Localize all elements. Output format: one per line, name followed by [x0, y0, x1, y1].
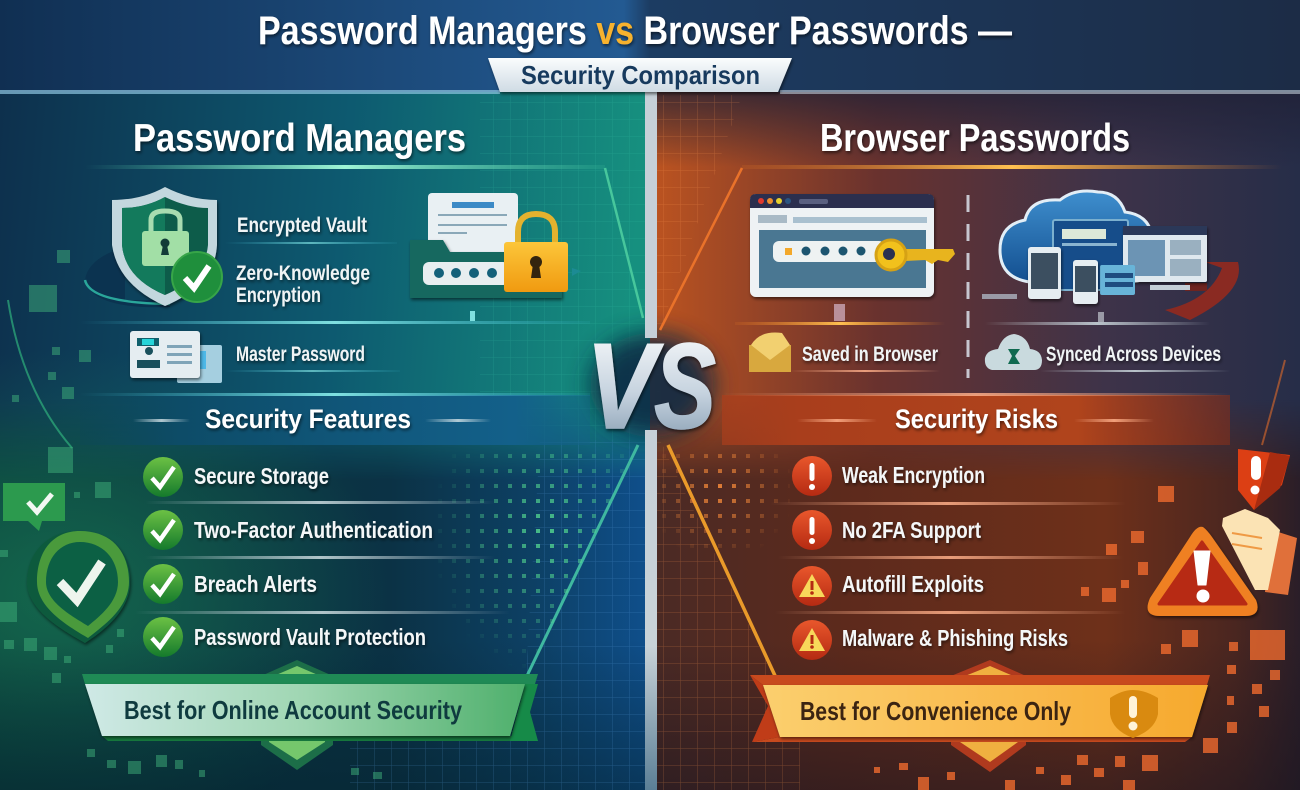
- label: saved in browser: Saved in Browser: [802, 343, 938, 366]
- background: right side: [650, 92, 1300, 790]
- security features band: [80, 393, 590, 445]
- badge: best for convenience only: Best for Convenience Only: [800, 696, 1071, 726]
- icon: folder with gold lock: [410, 193, 581, 298]
- vs emblem: [586, 318, 716, 454]
- item: malware and phishing risks: [792, 620, 1068, 660]
- panel: browser passwords: [660, 117, 1297, 790]
- item: weak encryption: [792, 456, 985, 496]
- icon: small cloud: [985, 334, 1042, 370]
- item: password vault protection: Password Vault Protection: [194, 624, 426, 650]
- background: left side: [0, 92, 650, 790]
- subtitle ribbon: Security Comparison: [521, 60, 760, 90]
- badge: best for online account security: [82, 660, 538, 770]
- icon: id card: [130, 331, 222, 383]
- label: synced across devices: Synced Across Devices: [1046, 343, 1221, 366]
- security features band: Security Features: [205, 404, 411, 434]
- item: breach alerts: [143, 564, 317, 604]
- item: two-factor authentication: [143, 510, 433, 550]
- dot matrix: [438, 454, 624, 653]
- item: two-factor authentication: Two-Factor Authentication: [194, 517, 433, 543]
- label: master password: Master Password: [236, 343, 365, 366]
- badge: best for convenience only: [750, 660, 1210, 772]
- item: no 2fa support: No 2FA Support: [842, 517, 981, 543]
- risk list: [770, 456, 1125, 660]
- red alert shield: [1238, 449, 1290, 510]
- item: password vault protection: [143, 617, 426, 657]
- icon: envelope: [749, 332, 791, 372]
- label: zero-knowledge encryption: Encryption: [236, 284, 321, 307]
- item: autofill exploits: [792, 566, 984, 606]
- vs emblem: S: [654, 318, 716, 454]
- feature list: [135, 457, 510, 657]
- header band: [0, 0, 1300, 92]
- item: secure storage: Secure Storage: [194, 463, 329, 489]
- vs backdrop: [590, 333, 714, 437]
- item: weak encryption: Weak Encryption: [842, 462, 985, 488]
- item: secure storage: [143, 457, 329, 497]
- speech bubble check: [3, 483, 65, 531]
- title: Password Managers vs Browser Passwords —: [258, 9, 1012, 53]
- label: zero-knowledge encryption: Zero-Knowledge: [236, 262, 370, 285]
- heading: browser passwords: Browser Passwords: [820, 117, 1130, 160]
- center divider: [645, 92, 657, 790]
- header rule: [0, 90, 1300, 94]
- security risks band: Security Risks: [895, 404, 1058, 434]
- item: autofill exploits: Autofill Exploits: [842, 571, 984, 597]
- icon: browser with key: [750, 194, 955, 321]
- panel: password managers: [0, 117, 643, 779]
- heading: password managers: Password Managers: [133, 117, 466, 160]
- floating squares: right: [874, 486, 1285, 790]
- vs emblem: V: [586, 318, 663, 454]
- item: malware and phishing risks: Malware & Phishing Risks: [842, 625, 1068, 651]
- icon: shield with lock: [85, 187, 222, 307]
- security risks band: [722, 393, 1230, 445]
- warning triangle: [1148, 527, 1258, 616]
- dashed divider: [966, 195, 970, 378]
- icon: cloud and devices: [982, 191, 1239, 320]
- big check shield: [27, 531, 130, 643]
- floating squares: left: [0, 250, 382, 779]
- dot matrix: [662, 454, 790, 548]
- item: no 2fa support: [792, 510, 981, 550]
- panel frame: left: [8, 165, 643, 680]
- label: encrypted vault: Encrypted Vault: [237, 214, 367, 237]
- item: breach alerts: Breach Alerts: [194, 571, 317, 597]
- panel frame: right: [660, 165, 1285, 680]
- badge: best for online account security: Best for Online Account Security: [124, 695, 462, 725]
- warning document: [1222, 509, 1297, 595]
